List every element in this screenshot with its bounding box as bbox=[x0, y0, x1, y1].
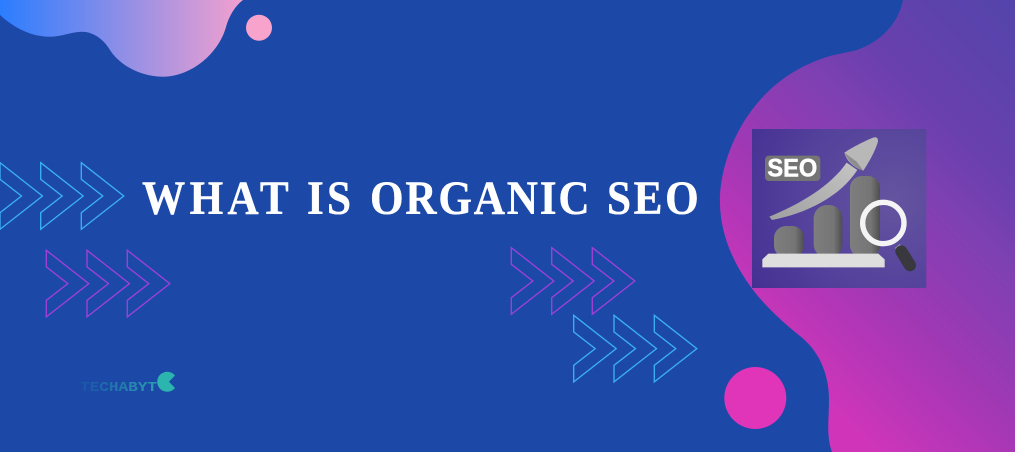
bar chart bars bbox=[774, 176, 880, 258]
chevron row: purple lower left bbox=[46, 250, 170, 317]
title bbox=[142, 171, 699, 225]
illustration background bbox=[752, 129, 926, 288]
rising arrow bbox=[769, 137, 878, 220]
magenta circle bbox=[724, 367, 786, 429]
logo: Techabyt bbox=[80, 372, 175, 396]
logo pacman mark bbox=[157, 372, 175, 392]
top-left gradient blob bbox=[0, 0, 243, 77]
SEO illustration bbox=[752, 129, 926, 288]
title: IS bbox=[307, 171, 351, 225]
chevron row: cyan center bbox=[574, 315, 697, 382]
magnifying glass bbox=[863, 202, 910, 265]
title: SEO bbox=[607, 171, 699, 225]
title: ORGANIC bbox=[370, 171, 590, 225]
SEO badge: SEO bbox=[767, 156, 817, 183]
pink circle bbox=[246, 15, 272, 41]
chevron row: purple center bbox=[511, 248, 635, 314]
right gradient blob bbox=[720, 0, 1015, 452]
logo wordmark: TECHABYT bbox=[80, 380, 157, 396]
chevron row: cyan upper left bbox=[0, 163, 124, 229]
title: WHAT bbox=[142, 171, 289, 225]
chart base bbox=[762, 254, 885, 267]
